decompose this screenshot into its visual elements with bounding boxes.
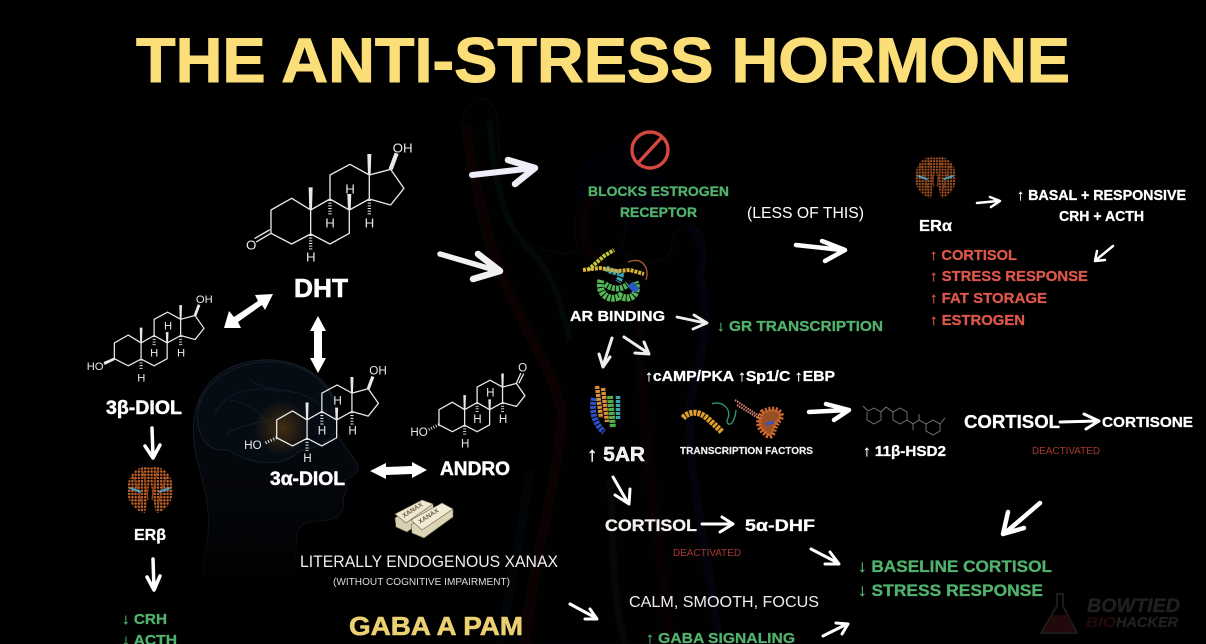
arrow: ERα to CRH and ACTH bbox=[977, 197, 1000, 207]
text: literally endogenous xanax: LITERALLY ENDOGENOUS XANAX bbox=[300, 552, 558, 571]
text: green outcomes: ↓ BASELINE CORTISOL bbox=[858, 557, 1052, 576]
molecule: DHT structure: H bbox=[345, 181, 355, 196]
molecule: 3α-diol structure: H bbox=[333, 395, 342, 408]
icon: androgen receptor protein bbox=[583, 250, 647, 298]
molecule: 3α-diol structure: HO bbox=[244, 439, 262, 452]
molecule: androsterone structure bbox=[410, 361, 527, 451]
logo: Bowtied Biohacker: BOWTIED bbox=[1087, 596, 1180, 617]
title: THE ANTI-STRESS HORMONE bbox=[136, 26, 1070, 96]
arrow: less of this to ERα bbox=[796, 241, 845, 261]
molecule: DHT structure: OH bbox=[393, 141, 413, 156]
arrow: cortisone to baseline cortisol bbox=[1003, 503, 1040, 534]
text: red effects list: ↑ ESTROGEN bbox=[930, 312, 1025, 329]
label: 3β-DIOL: 3β-DIOL bbox=[106, 398, 182, 419]
text: AR binding: AR BINDING bbox=[570, 308, 665, 325]
icon: 5AR protein bbox=[593, 386, 618, 432]
arrow: DHT to blocks estrogen bbox=[472, 160, 535, 184]
arrow: 5α-DHF to baseline cortisol bbox=[811, 549, 839, 564]
arrow: CRH and ACTH to effects bbox=[1095, 246, 1113, 261]
molecule: androsterone structure: O bbox=[518, 361, 527, 374]
arrow: 3β-diol to ERβ bbox=[145, 428, 160, 458]
icon: ERβ protein bbox=[127, 467, 173, 513]
text: cortisol to cortisone: CORTISONE bbox=[1102, 414, 1193, 431]
text: green outcomes bbox=[858, 557, 1052, 600]
heading: GABA A PAM: GABA A PAM bbox=[349, 611, 523, 641]
text: calm smooth focus: CALM, SMOOTH, FOCUS bbox=[629, 594, 819, 611]
molecule: 3β-diol structure: OH bbox=[196, 294, 213, 306]
icon: ERα protein bbox=[915, 157, 956, 198]
molecule: 3α-diol structure bbox=[244, 365, 387, 465]
logo: Bowtied Biohacker: BIO bbox=[1086, 614, 1116, 631]
molecule: DHT structure: H bbox=[306, 249, 316, 264]
arrow: GABA A PAM to calm bbox=[570, 604, 597, 619]
text: cortisol to cortisone: CORTISOL bbox=[964, 412, 1060, 432]
molecule: 3α-diol structure: H bbox=[348, 424, 357, 437]
arrow: AR binding to 5AR bbox=[599, 338, 612, 367]
molecule: DHT structure: H bbox=[325, 215, 335, 230]
text: lowered GR transcription: ↓ GR TRANSCRIPTION bbox=[717, 318, 883, 335]
molecule: androsterone structure: HO bbox=[410, 426, 428, 439]
molecule: 11β-HSD2 structure bbox=[863, 406, 945, 435]
molecule: androsterone structure: H bbox=[499, 413, 507, 426]
molecule: 3β-diol structure: H bbox=[137, 373, 145, 385]
label: DHT: DHT bbox=[294, 273, 348, 303]
arrow: ERβ to CRH bbox=[147, 559, 160, 590]
text: raised 5AR: ↑ 5AR bbox=[587, 444, 646, 466]
icon: xanax pills: XANAX bbox=[417, 507, 441, 526]
text: less of this: (LESS OF THIS) bbox=[747, 205, 864, 222]
molecule: androsterone structure: H bbox=[461, 438, 469, 451]
icon: transcription factor proteins bbox=[683, 400, 781, 436]
text: red effects list bbox=[930, 247, 1088, 329]
molecule: 3α-diol structure: H bbox=[303, 452, 312, 465]
arrow: 5AR to cortisol bbox=[613, 477, 630, 504]
arrow: GABA signaling to outcomes bbox=[823, 623, 848, 636]
text: red effects list: ↑ STRESS RESPONSE bbox=[930, 268, 1088, 285]
label: ERβ: ERβ bbox=[134, 527, 166, 544]
arrow: AR binding to transcription factors bbox=[624, 337, 649, 354]
background: head and brain silhouette bbox=[193, 360, 358, 590]
text: blocks estrogen receptor: RECEPTOR bbox=[620, 205, 697, 220]
molecule: 3β-diol structure: H bbox=[177, 347, 185, 359]
molecule: DHT structure bbox=[246, 141, 413, 264]
molecule: 3β-diol structure bbox=[87, 294, 213, 385]
text: lowered CRH: ↓ CRH bbox=[122, 611, 167, 628]
molecule: 3β-diol structure: H bbox=[150, 347, 158, 359]
icon: xanax pills bbox=[395, 500, 453, 538]
text: cortisol to 5α-DHF bbox=[605, 516, 815, 535]
text: cAMP PKA Sp1 C EBP: ↑cAMP/PKA ↑Sp1/C ↑EBP bbox=[645, 368, 835, 385]
molecule: DHT structure: H bbox=[365, 215, 374, 230]
icon: xanax pills: XANAX bbox=[401, 501, 425, 520]
text: green outcomes: ↓ STRESS RESPONSE bbox=[858, 581, 1043, 600]
arrow: 3α-diol to andro bbox=[370, 462, 427, 479]
molecule: 3β-diol structure: HO bbox=[87, 361, 104, 373]
text: raised 11β-HSD2: ↑ 11β-HSD2 bbox=[863, 443, 946, 460]
arrow: DHT to 3α-diol bbox=[310, 316, 326, 373]
text: deactivated 5α-DHF: DEACTIVATED bbox=[673, 548, 741, 559]
label: ANDRO: ANDRO bbox=[440, 459, 510, 480]
molecule: 3α-diol structure: OH bbox=[369, 365, 387, 378]
arrow: DHT to AR binding bbox=[440, 254, 500, 279]
molecule: DHT structure: O bbox=[246, 237, 256, 252]
text: basal and responsive CRH and ACTH bbox=[1017, 187, 1186, 225]
text: blocks estrogen receptor bbox=[588, 184, 729, 220]
text: basal and responsive CRH and ACTH: ↑ BASAL + RESPONSIVE bbox=[1017, 187, 1186, 204]
text: red effects list: ↑ FAT STORAGE bbox=[930, 290, 1047, 307]
logo: Bowtied Biohacker bbox=[1041, 594, 1180, 633]
text: cortisol to 5α-DHF: 5α-DHF bbox=[745, 516, 815, 535]
label: 3α-DIOL: 3α-DIOL bbox=[270, 469, 345, 490]
text: cortisol to 5α-DHF: CORTISOL bbox=[605, 516, 697, 535]
background: human figure silhouette bbox=[462, 99, 722, 644]
arrow: AR binding to GR transcription bbox=[677, 315, 707, 329]
molecule: 3β-diol structure: H bbox=[164, 320, 172, 332]
icon: no symbol bbox=[632, 132, 668, 168]
text: red effects list: ↑ CORTISOL bbox=[930, 247, 1017, 264]
arrow: transcription factors to 11β-HSD2 bbox=[809, 404, 849, 420]
text: cortisol to cortisone bbox=[964, 412, 1193, 432]
label: ERα: ERα bbox=[919, 218, 952, 235]
molecule: 3α-diol structure: H bbox=[318, 424, 326, 437]
text: transcription factors: TRANSCRIPTION FACTORS bbox=[680, 446, 813, 457]
text: blocks estrogen receptor: BLOCKS ESTROGEN bbox=[588, 184, 729, 199]
molecule: androsterone structure: H bbox=[473, 413, 482, 426]
text: without cognitive impairment: (WITHOUT COGNITIVE IMPAIRMENT) bbox=[333, 576, 510, 588]
text: basal and responsive CRH and ACTH: CRH + ACTH bbox=[1059, 208, 1144, 225]
arrow: DHT to 3β-diol bbox=[224, 294, 273, 328]
molecule: androsterone structure: H bbox=[486, 386, 495, 399]
text: deactivated cortisone: DEACTIVATED bbox=[1032, 446, 1100, 457]
logo: Bowtied Biohacker: HACKER bbox=[1116, 614, 1178, 631]
